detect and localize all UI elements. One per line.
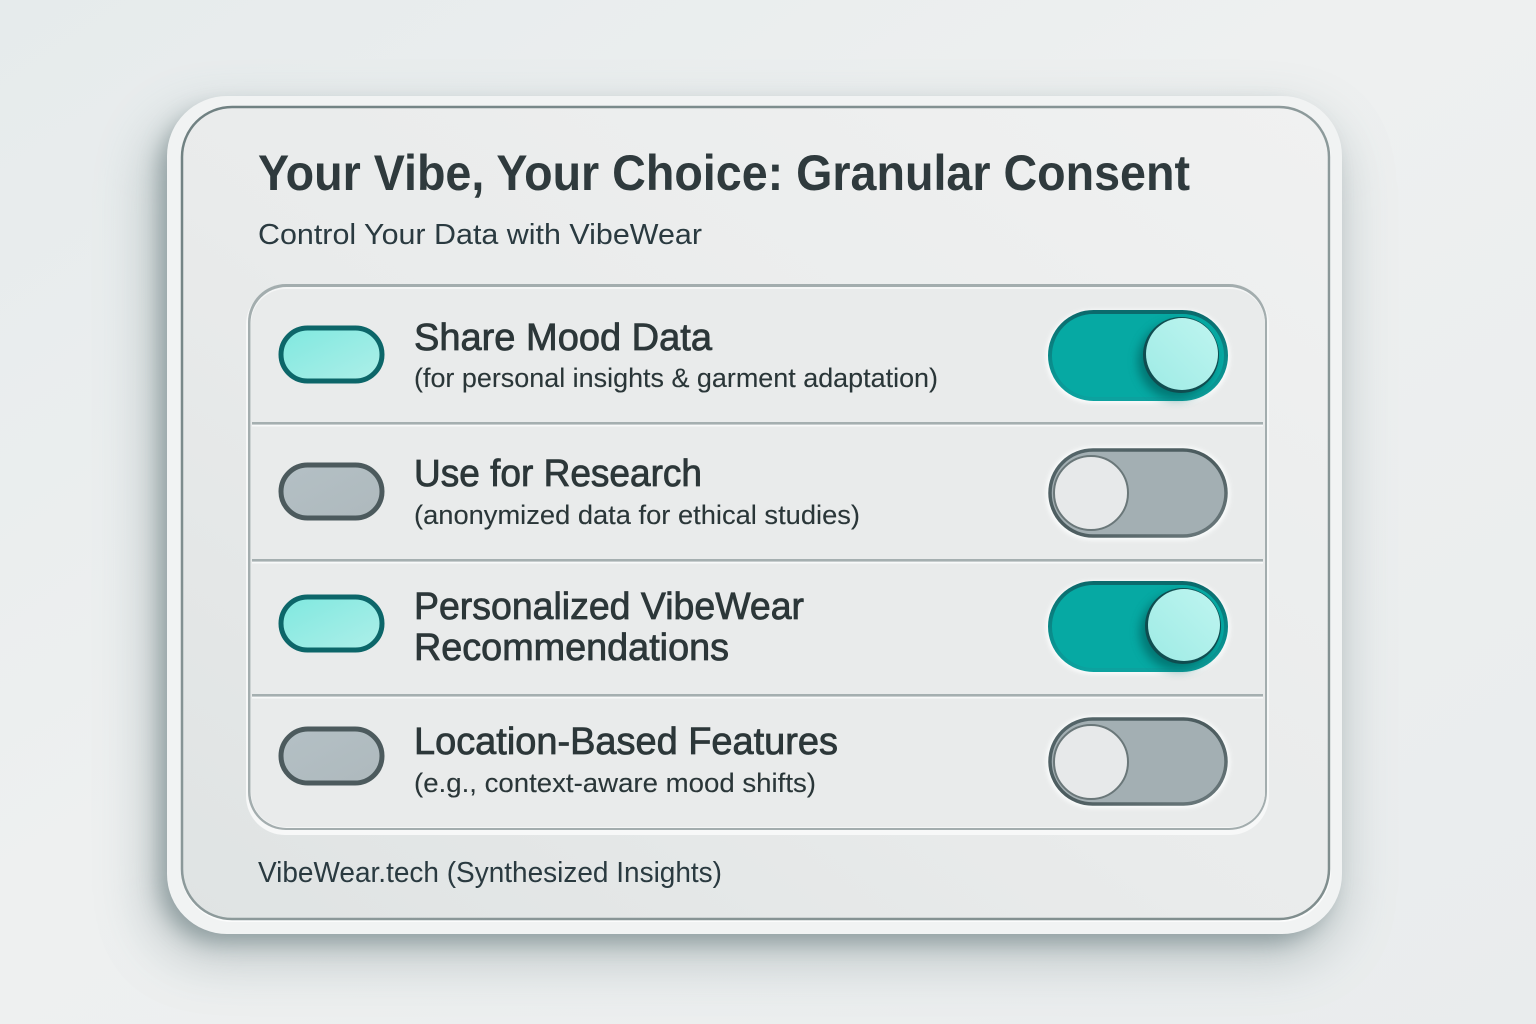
label: personalized vibewear recommendations xyxy=(414,586,804,669)
label: location-based features: Location-Based Features xyxy=(414,721,838,763)
label: personalized vibewear recommendations: Recommendations xyxy=(414,627,729,669)
toggle off xyxy=(1046,447,1230,540)
subtitle: Control Your Data with VibeWear xyxy=(258,219,702,251)
toggle on xyxy=(1046,581,1230,674)
row: location-based features xyxy=(281,716,1230,808)
row: use for research xyxy=(281,447,1230,540)
toggle on xyxy=(1046,310,1230,403)
label: use for research: Use for Research xyxy=(414,453,702,495)
row: personalized recommendations xyxy=(281,581,1230,674)
toggle off xyxy=(1046,716,1230,808)
icon: status pill off xyxy=(281,465,382,518)
label: share mood data: Share Mood Data xyxy=(414,317,713,359)
icon: status pill off xyxy=(281,729,382,783)
panel: consent card xyxy=(167,96,1342,934)
title: Your Vibe, Your Choice: Granular Consent xyxy=(258,145,1190,201)
card shadow xyxy=(150,110,1340,958)
description: use for research: (anonymized data for ethical studies) xyxy=(414,500,860,530)
row: share mood data xyxy=(281,310,1230,403)
label: personalized vibewear recommendations: Personalized VibeWear xyxy=(414,586,804,628)
icon: status pill on xyxy=(281,597,382,650)
description: share mood data: (for personal insights & garment adaptation) xyxy=(414,363,938,393)
icon: status pill on xyxy=(281,328,382,381)
footer source: VibeWear.tech (Synthesized Insights) xyxy=(258,857,722,889)
panel: consent options xyxy=(246,284,1269,835)
description: location-based features: (e.g., context-aware mood shifts) xyxy=(414,768,816,798)
